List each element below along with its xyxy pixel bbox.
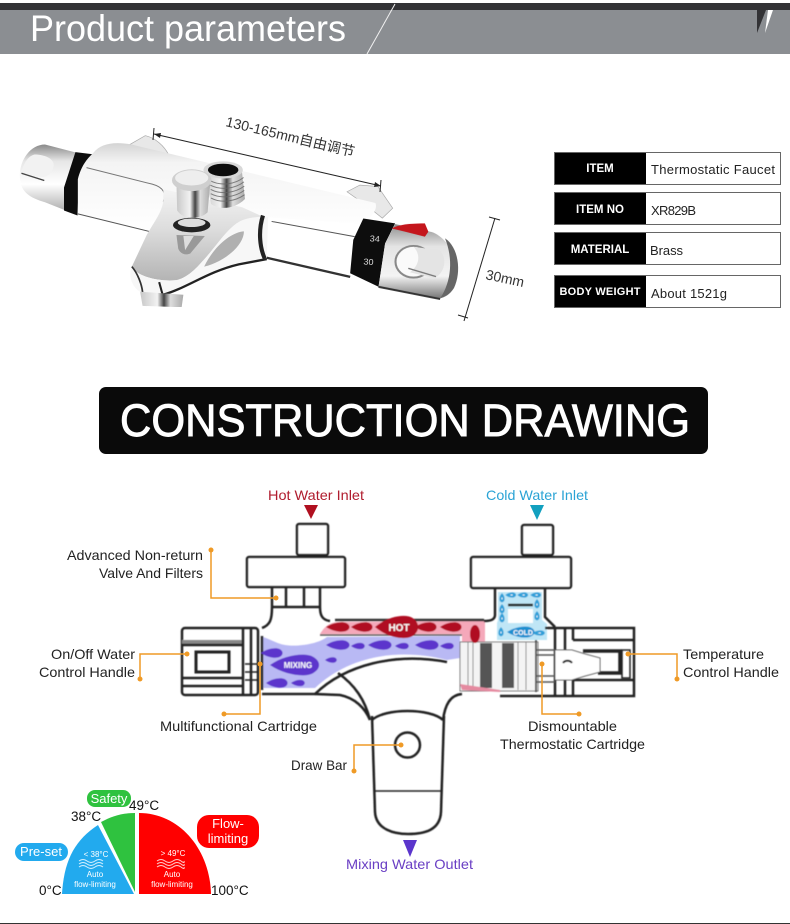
mixing label: MIXING — [284, 661, 312, 670]
row: item: ITEM — [586, 163, 614, 175]
temperature marks: 38°C — [71, 809, 101, 824]
label: on/off handle: On/Off Water — [51, 646, 135, 662]
red sector text — [151, 849, 193, 889]
label: cold water inlet: Cold Water Inlet — [486, 487, 588, 503]
row: item: Thermostatic Faucet — [651, 162, 775, 177]
temperature marks: 0°C — [39, 883, 62, 898]
blue sector text: Auto — [87, 870, 104, 879]
right cap — [379, 224, 458, 298]
red sector text: > 49°C — [161, 849, 186, 858]
mixing water drops — [261, 640, 454, 688]
right temperature band — [350, 218, 395, 287]
left knob — [20, 145, 77, 211]
label: control handle left: Control Handle — [39, 664, 135, 680]
height label: 30mm — [484, 266, 526, 290]
spec table — [554, 152, 780, 308]
temperature marks: 49°C — [129, 798, 159, 813]
center lever — [315, 673, 462, 834]
threaded nut — [204, 168, 245, 208]
hot inlet fitting — [247, 524, 345, 628]
thermostatic cartridge — [460, 640, 600, 692]
label: temperature: Temperature — [683, 646, 764, 662]
label: hot water inlet — [268, 487, 364, 519]
label: valve and filters: Valve And Filters — [99, 565, 203, 581]
hot label: HOT — [388, 623, 410, 634]
label: mixing water outlet: Mixing Water Outlet — [346, 856, 473, 872]
body outlines — [335, 619, 484, 621]
dimension: width — [153, 113, 381, 192]
label: non-return valve: Advanced Non-return — [67, 547, 203, 563]
red sector text: Auto — [164, 870, 181, 879]
black band left — [64, 152, 97, 216]
cold channel — [497, 592, 547, 640]
hot channel — [320, 621, 485, 646]
sector: red flow-limiting — [139, 813, 211, 894]
diverter knob — [176, 181, 210, 218]
badge: pre-set — [15, 843, 68, 861]
rear mounting nubs — [130, 136, 393, 218]
blue sector text — [74, 850, 116, 889]
row: item — [554, 152, 780, 184]
width label: 130-165mm自由调节 — [224, 113, 356, 160]
row: material: Brass — [650, 243, 684, 258]
row: body weight — [554, 276, 780, 308]
label: draw bar: Draw Bar — [291, 757, 347, 773]
cold badge — [507, 626, 534, 638]
badge: flow-limiting: limiting — [208, 831, 248, 846]
row: material — [554, 232, 780, 264]
cold label: COLD — [513, 630, 533, 637]
label: dismountable: Dismountable — [528, 718, 617, 734]
sector: blue pre-set — [62, 825, 134, 894]
faucet product illustration: 30 — [363, 257, 374, 267]
spout lip — [130, 217, 268, 294]
label: cold water inlet — [486, 487, 588, 520]
red sector text: flow-limiting — [151, 880, 193, 889]
lower body — [265, 219, 355, 275]
orange leader lines — [138, 548, 680, 774]
temperature marks — [39, 798, 249, 898]
main body — [78, 143, 376, 232]
red lever — [392, 223, 428, 237]
sector: green safety — [101, 813, 135, 892]
blue sector text: flow-limiting — [74, 880, 116, 889]
blue sector text: < 38°C — [84, 850, 109, 859]
cold water drops — [499, 593, 543, 635]
dial numbers: 34 — [369, 233, 380, 244]
right handle — [500, 628, 634, 696]
construction drawing banner: CONSTRUCTION DRAWING — [120, 395, 690, 446]
neck plate — [132, 189, 263, 281]
badge: safety: Safety — [91, 791, 128, 806]
label: thermostatic cartridge: Thermostatic Cartridge — [500, 736, 645, 752]
spout outlet — [140, 292, 183, 307]
label: mixing water outlet — [346, 840, 473, 872]
badge: flow-limiting: Flow- — [212, 816, 244, 831]
heading: product parameters: Product parameters — [30, 8, 346, 49]
row: item no: XR829B — [651, 203, 696, 218]
valve cross-section diagram — [182, 524, 634, 834]
temperature marks: 100°C — [211, 883, 249, 898]
dimension: height — [458, 217, 526, 321]
label: multifunctional cartridge: Multifunctional Cartridge — [160, 718, 317, 734]
badge: flow-limiting — [197, 815, 259, 848]
badge: pre-set: Pre-set — [20, 844, 62, 859]
header banner — [0, 3, 790, 54]
hot water drops — [326, 616, 480, 643]
mixing chamber — [263, 636, 460, 688]
row: item no — [554, 192, 780, 224]
cold inlet fitting — [471, 525, 571, 627]
row: body weight: BODY WEIGHT — [560, 286, 641, 298]
row: item no: ITEM NO — [576, 204, 624, 216]
temperature range chart — [15, 790, 259, 898]
faucet product illustration — [20, 136, 458, 307]
label: control handle right: Control Handle — [683, 664, 779, 680]
label: hot water inlet: Hot Water Inlet — [268, 487, 364, 503]
row: body weight: About 1521g — [651, 286, 727, 301]
left handle — [182, 628, 258, 695]
row: material: MATERIAL — [571, 244, 629, 256]
